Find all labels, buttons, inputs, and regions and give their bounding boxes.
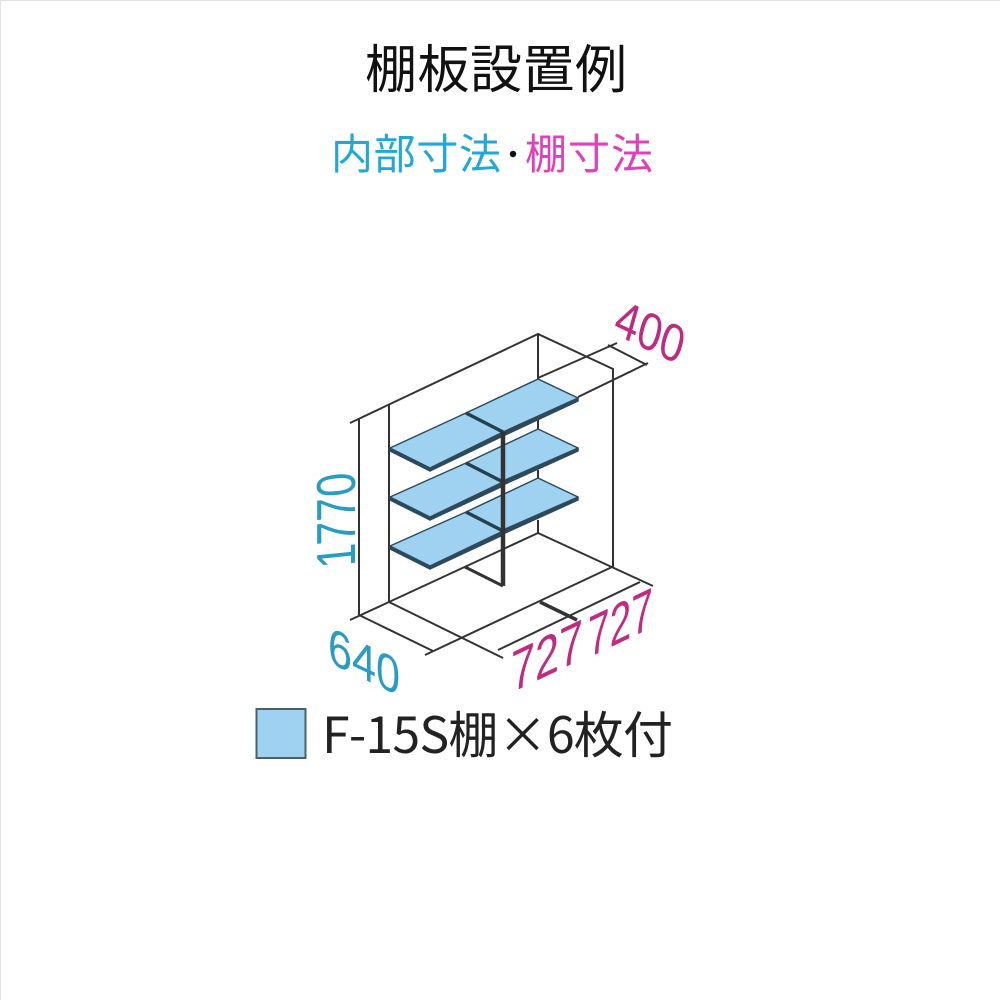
- divider mark on floor: [540, 602, 577, 620]
- title: 棚板設置例: [365, 28, 627, 103]
- shelf seams: [466, 413, 503, 531]
- legend swatch: [256, 709, 306, 758]
- shelf: middle left: [390, 463, 503, 520]
- shelf: lower right: [466, 478, 578, 534]
- subtitle: interior and shelf dimensions: [331, 121, 653, 182]
- centre post foot: [465, 567, 503, 586]
- shelf: lower left: [390, 512, 503, 569]
- subtitle: interior and shelf dimensions: 内部寸法: [331, 121, 501, 182]
- dimension: shelf depth 400: 400: [609, 288, 691, 376]
- shelf: top left: [390, 413, 503, 471]
- diagram: shelf unit: [305, 288, 691, 708]
- shelf: middle right: [466, 429, 578, 485]
- dimension: width 727 right: 727: [588, 576, 653, 671]
- subtitle: interior and shelf dimensions: 棚寸法: [525, 121, 653, 182]
- dimension: depth 640: 640: [328, 616, 400, 708]
- dimension: height 1770: 1770: [305, 470, 367, 571]
- legend label: F-15S棚×6枚付: [322, 696, 673, 768]
- shelves: [390, 379, 578, 569]
- centre post: [501, 432, 505, 586]
- wall and floor frame lines: [350, 334, 653, 658]
- legend: [256, 696, 673, 768]
- shelf: top right: [466, 379, 578, 436]
- dimension: width 727 left: 727: [511, 608, 583, 706]
